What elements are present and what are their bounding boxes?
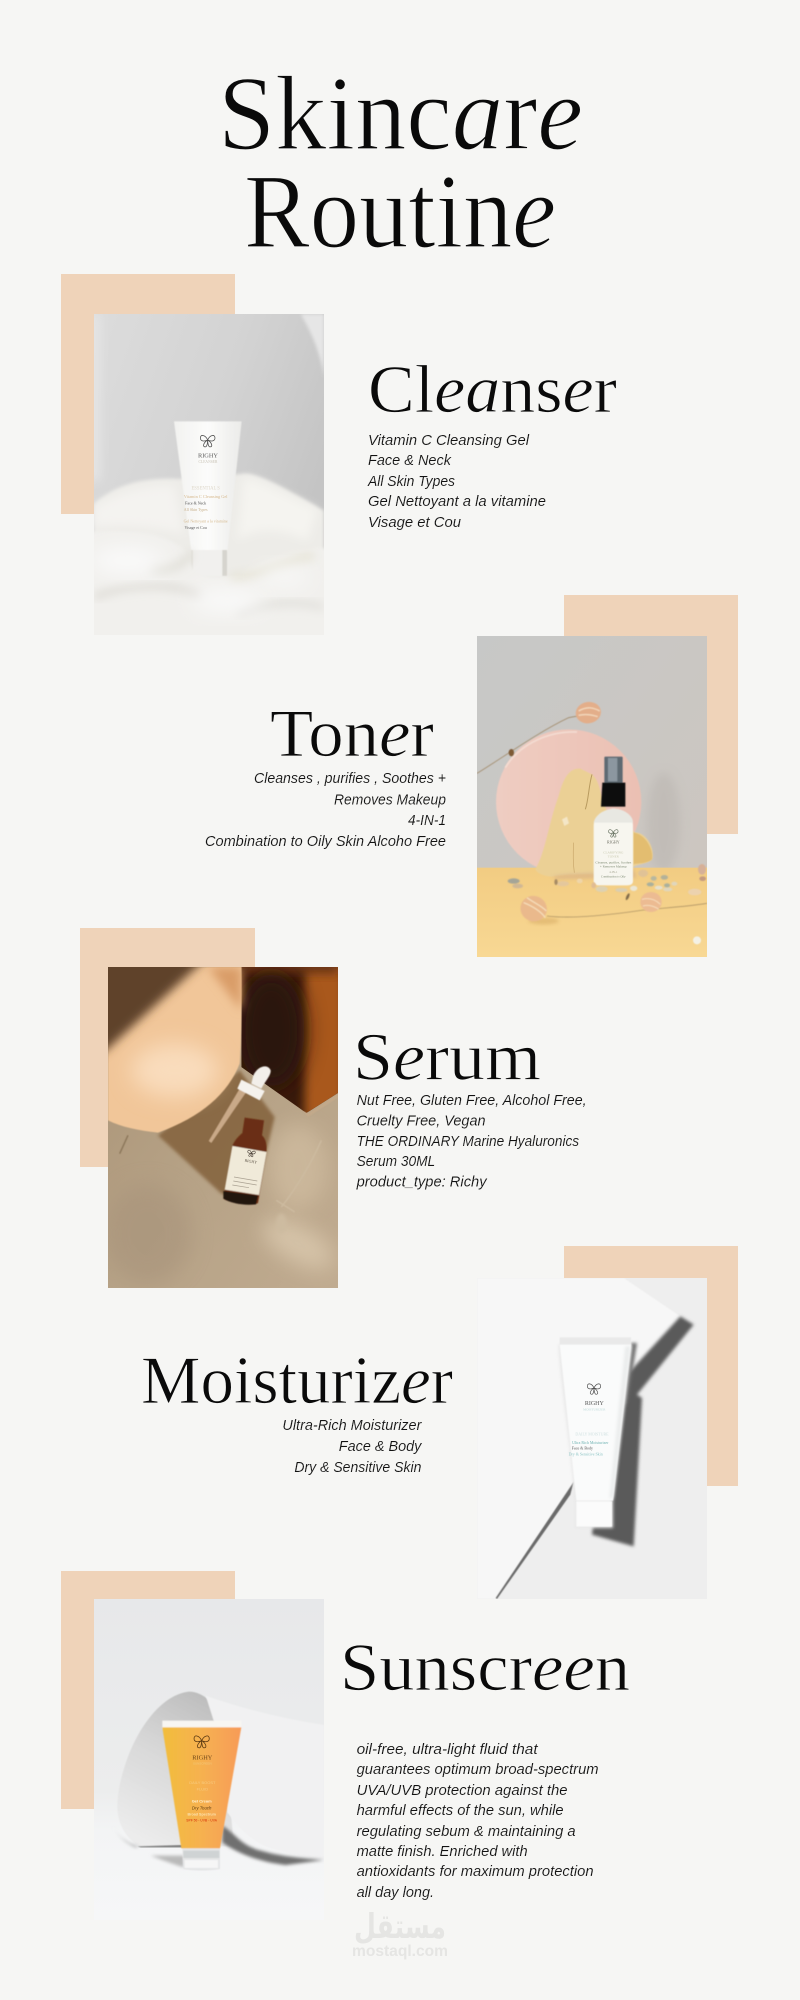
text: cleanser details: All Skin Types <box>367 473 455 490</box>
dropper <box>209 1066 271 1143</box>
grey arch <box>117 1692 234 1846</box>
text: sunscreen description: antioxidants for maximum protection <box>357 1863 594 1880</box>
text: toner details: 4-IN-1 <box>408 812 446 829</box>
text: serum details: Cruelty Free, Vegan <box>357 1112 486 1130</box>
text: moisturizer details <box>282 1417 423 1476</box>
bottle label text: RIGHY <box>244 1158 258 1165</box>
sheet shadow <box>222 1826 324 1865</box>
tube <box>162 1721 241 1870</box>
photo: sunscreen orange tube <box>94 1599 324 1870</box>
title: Skincare <box>218 55 583 172</box>
panel: moisturizer <box>141 1246 738 1599</box>
tube label text: RIGHY <box>585 1401 604 1407</box>
text: toner details: Combination to Oily Skin Alcoho Free <box>205 833 446 850</box>
photo: cleanser tube on white linen <box>94 314 324 616</box>
bottle label text: TONER <box>608 854 620 858</box>
text: sunscreen description: all day long. <box>357 1884 434 1901</box>
text: cleanser details <box>367 432 546 531</box>
tube label text: MOISTURIZER <box>583 1407 606 1411</box>
heading: Sunscreen: Sunscreen <box>340 1629 630 1705</box>
tube edge shading <box>559 1345 632 1528</box>
bottle logo <box>609 830 618 837</box>
tube label text: Gel Cream <box>192 1799 212 1804</box>
pebbles and dried flowers <box>508 864 706 944</box>
watermark: مستقل <box>354 1907 446 1947</box>
text: moisturizer details: Face & Body <box>339 1438 423 1455</box>
bottle label text: Cleanses, purifies, Soothes <box>595 860 632 865</box>
tube label text: DAILY BOOST <box>189 1780 216 1785</box>
heading: Moisturizer: Moisturizer <box>141 1342 453 1418</box>
tube label text <box>569 1401 609 1457</box>
peach backing block: cleanser <box>61 274 235 514</box>
tube label text: DAILY MOISTURE <box>575 1432 609 1437</box>
bottle logo <box>247 1150 255 1157</box>
tube label text: ESSENTIAL S <box>191 487 220 492</box>
text: sunscreen description: harmful effects of the sun, while <box>357 1802 564 1819</box>
peach fabric <box>108 967 242 1133</box>
text: moisturizer details: Ultra-Rich Moisturizer <box>282 1417 422 1434</box>
cast shadows <box>592 1316 694 1546</box>
bottle label text <box>595 839 632 879</box>
amber bottle <box>223 1118 267 1205</box>
bottle label text: CLARIFYING <box>603 850 624 854</box>
tube logo <box>587 1384 601 1394</box>
photo: serum dropper bottle on kraft paper <box>108 967 338 1288</box>
dark box <box>238 957 345 1120</box>
watermark: mostaql.com <box>352 1943 448 1960</box>
white curved sheet <box>206 1698 232 1817</box>
bottle label text: Combination to Oily <box>601 875 626 879</box>
spray bottle <box>594 757 633 885</box>
tube label text: Dry & Sensitive Skin <box>569 1452 603 1457</box>
text: toner details: Cleanses , purifies , Soothes + <box>254 770 446 787</box>
panel: cleanser <box>61 274 617 644</box>
peach backing block: moisturizer <box>564 1246 738 1486</box>
panel: sunscreen <box>61 1571 630 1920</box>
tube label text: Gel Nettoyant a la vitamine <box>184 518 228 523</box>
tube label text: Ultra Rich Moisturizer <box>572 1440 609 1445</box>
text: sunscreen description: regulating sebum & maintaining a <box>357 1823 576 1840</box>
tube label text <box>186 1754 218 1822</box>
heading: Cleanser: Cleanser <box>368 351 617 427</box>
text: toner details <box>205 770 446 850</box>
photo: moisturizer tube with hard shadow <box>477 1278 707 1599</box>
brown shadow on paper <box>158 1070 275 1200</box>
tube label text: SPF 50 - UVB - UVA <box>186 1818 218 1822</box>
text: sunscreen description: guarantees optimum broad-spectrum <box>357 1761 599 1778</box>
tube label text: FLUID <box>197 1787 208 1792</box>
text: serum details: Serum 30ML <box>357 1153 435 1170</box>
text: sunscreen description: oil-free, ultra-light fluid that <box>357 1741 538 1758</box>
tube label text: Vitamin C Cleansing Gel <box>184 494 228 499</box>
tube label text: Dry Touch <box>192 1806 212 1811</box>
bottle label text: 4-IN-1 <box>609 870 618 874</box>
tube label text: RIGHY <box>192 1754 213 1761</box>
title <box>218 55 583 270</box>
bottle label text: + Removes Makeup <box>600 864 627 868</box>
peach backing block: toner <box>564 595 738 834</box>
tube label text: SUNSCREEN <box>193 1762 212 1766</box>
title: Routine <box>244 153 556 270</box>
text: serum details: product_type: Richy <box>356 1174 488 1190</box>
text: toner details: Removes Makeup <box>334 792 446 808</box>
panel: toner <box>205 595 738 957</box>
text: serum details: THE ORDINARY Marine Hyaluronics <box>357 1133 580 1150</box>
text: cleanser details: Vitamin C Cleansing Gel <box>368 432 530 449</box>
text: sunscreen description: matte finish. Enriched with <box>357 1843 528 1860</box>
tube label text: Broad Spectrum <box>187 1813 217 1817</box>
tube logo <box>194 1736 209 1748</box>
tube <box>560 1337 631 1345</box>
text: sunscreen description: UVA/UVB protection against the <box>357 1782 568 1799</box>
bottle label text: RIGHY <box>607 839 620 844</box>
peach backing block: serum <box>80 928 255 1167</box>
text: cleanser details: Gel Nettoyant a la vitamine <box>368 493 546 510</box>
peach backing block: sunscreen <box>61 1571 235 1809</box>
text: moisturizer details: Dry & Sensitive Skin <box>294 1459 421 1476</box>
text: serum details: Nut Free, Gluten Free, Alcohol Free, <box>357 1092 587 1109</box>
text: cleanser details: Visage et Cou <box>368 514 462 531</box>
tube label text: Visage et Cou <box>184 525 207 530</box>
text: sunscreen description <box>357 1741 599 1901</box>
text: cleanser details: Face & Neck <box>368 452 452 469</box>
tube label text: Face & Neck <box>185 500 206 505</box>
tube label text: CLEANSER <box>199 460 218 464</box>
tube label text: RIGHY <box>198 452 218 459</box>
text: serum details <box>356 1092 587 1190</box>
tube label text: All Skin Types <box>184 507 208 512</box>
tube logo <box>200 435 215 447</box>
tube label text <box>184 452 228 530</box>
panel: serum <box>80 928 587 1288</box>
heading: Serum: Serum <box>353 1018 541 1094</box>
photo: toner spray bottle with pink disc <box>477 636 707 957</box>
tube label text: Face & Body <box>572 1445 593 1450</box>
heading: Toner: Toner <box>270 695 434 771</box>
